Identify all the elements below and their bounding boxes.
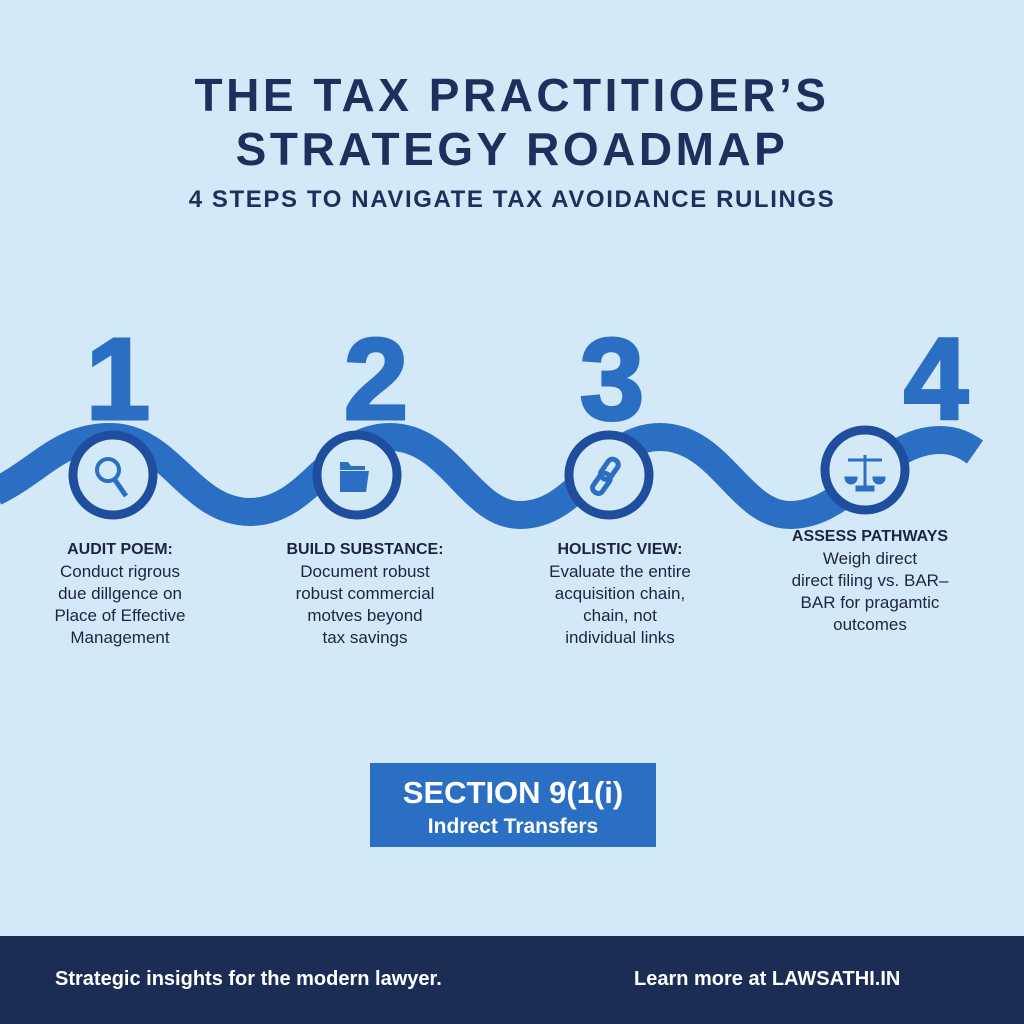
step 1 text: Conduct rigrous	[60, 562, 180, 581]
step numbers	[86, 314, 968, 444]
footer: Strategic insights for the modern lawyer.	[55, 968, 442, 990]
icon: magnifier	[97, 459, 126, 496]
step 1 text: AUDIT POEM:	[67, 541, 173, 558]
roadmap graphic	[0, 320, 983, 529]
step 2 text: Document robust	[300, 562, 430, 581]
step 4 text: Weigh direct	[823, 549, 917, 568]
step 2 text	[286, 541, 444, 647]
step 1 text: Management	[70, 628, 170, 647]
step 3 text: HOLISTIC VIEW:	[557, 541, 683, 558]
section box: SECTION 9(1(i)	[403, 775, 623, 810]
step 2 text: BUILD SUBSTANCE:	[286, 541, 444, 558]
step 3 text	[549, 541, 691, 647]
footer	[0, 936, 1024, 1024]
step 1 text	[54, 541, 186, 647]
step 4 text: outcomes	[833, 615, 907, 634]
title	[195, 69, 829, 175]
step 2 text: robust commercial	[296, 584, 434, 603]
title: THE TAX PRACTITIOER’S	[195, 69, 829, 121]
icon: chain link	[591, 457, 620, 495]
footer: Learn more at LAWSATHI.IN	[634, 968, 900, 990]
section box	[370, 763, 656, 847]
step 3 text: individual links	[565, 628, 675, 647]
step 1 text: due dillgence on	[58, 584, 182, 603]
step 4 text: direct filing vs. BAR–	[792, 571, 948, 590]
section box: Indrect Transfers	[428, 815, 598, 838]
step 2 text: motves beyond	[307, 606, 423, 625]
step 4 text: BAR for pragamtic	[801, 593, 939, 612]
icon: folder	[340, 462, 369, 492]
icon circles	[73, 430, 905, 515]
step 2 text: tax savings	[322, 628, 408, 647]
subtitle: 4 STEPS TO NAVIGATE TAX AVOIDANCE RULINGS	[189, 186, 835, 213]
step 3 text: Evaluate the entire	[549, 562, 691, 581]
title: STRATEGY ROADMAP	[236, 123, 788, 175]
wave path	[0, 437, 975, 515]
step 3 text: chain, not	[583, 606, 657, 625]
step 4 text	[792, 528, 948, 634]
step 3 text: acquisition chain,	[555, 584, 685, 603]
step 1 text: Place of Effective	[54, 606, 186, 625]
step 4 text: ASSESS PATHWAYS	[792, 528, 948, 545]
icon: scales	[846, 455, 884, 490]
